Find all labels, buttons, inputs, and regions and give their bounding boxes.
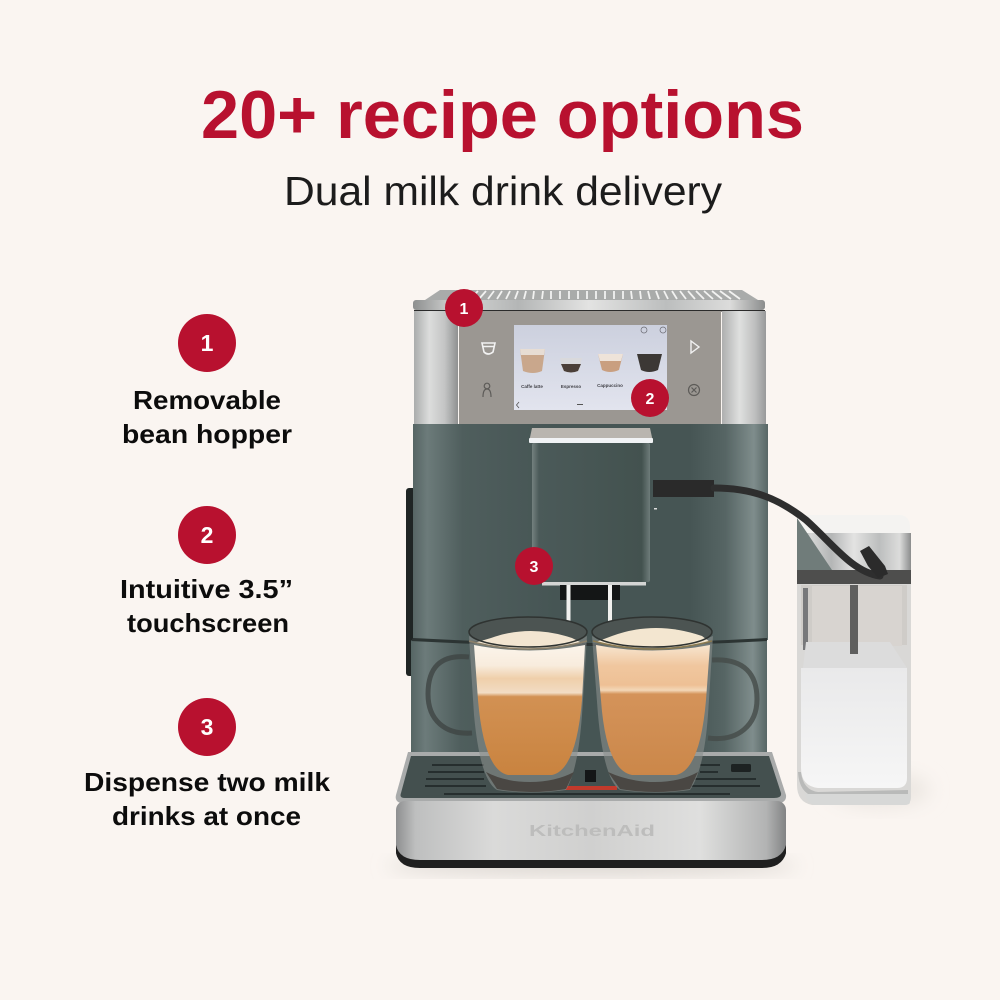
panel icon: play — [691, 341, 699, 353]
drink: caffe latte: Caffe latte — [521, 384, 543, 389]
feature 2: intuitive touchscreen: Intuitive 3.5” — [120, 574, 293, 604]
right cup — [592, 617, 757, 792]
chrome side left — [414, 311, 458, 424]
panel icon: cup — [482, 343, 495, 354]
left cup — [428, 617, 587, 792]
touchscreen — [514, 325, 667, 410]
feature 1: removable bean hopper — [122, 314, 292, 449]
title: 20+ recipe options — [201, 77, 804, 153]
callout badge 1 — [445, 289, 483, 327]
top lid with bean hopper grate — [413, 290, 765, 312]
feature 3: two milk drinks: 3 — [201, 714, 213, 740]
feature 1: removable bean hopper: bean hopper — [122, 419, 292, 449]
dispenser head — [529, 428, 657, 643]
brand name on tray: KitchenAid — [529, 823, 655, 840]
feature 3: two milk drinks: Dispense two milk — [84, 767, 331, 797]
callout badge 2: 2 — [646, 391, 655, 408]
green lower body — [411, 640, 767, 758]
drink: cappuccino: Cappuccino — [597, 383, 623, 388]
feature 3: two milk drinks: drinks at once — [112, 801, 301, 831]
drink: caffe latte — [520, 349, 545, 389]
drip tray — [396, 752, 786, 868]
control panel — [459, 311, 721, 424]
callout badge 3 — [515, 547, 553, 585]
drink: espresso: Espresso — [561, 384, 581, 389]
subtitle: Dual milk drink delivery — [284, 168, 723, 214]
drink: dark coffee — [637, 354, 662, 372]
coffee machine — [396, 290, 888, 868]
feature 1: removable bean hopper: Removable — [133, 385, 281, 415]
drink: cappuccino — [597, 354, 623, 388]
feature 1: removable bean hopper: 1 — [201, 330, 214, 356]
green upper body — [413, 424, 768, 640]
feature list — [84, 314, 331, 831]
panel icon: person — [483, 383, 491, 397]
back left panel — [406, 488, 416, 676]
panel icon: cancel — [688, 384, 700, 396]
chrome side right — [722, 311, 766, 424]
feature 3: two milk drinks — [84, 698, 331, 831]
machine shadow — [387, 858, 797, 874]
drink: espresso — [560, 358, 582, 389]
milk tube — [653, 480, 888, 578]
callout badge 2 — [631, 379, 669, 417]
milk pitcher — [797, 515, 930, 808]
feature 2: intuitive touchscreen: 2 — [201, 522, 213, 548]
feature 2: intuitive touchscreen: touchscreen — [127, 608, 289, 638]
feature 2: intuitive touchscreen — [120, 506, 293, 638]
callout badge 1: 1 — [460, 301, 469, 318]
callout badge 3: 3 — [530, 559, 539, 576]
